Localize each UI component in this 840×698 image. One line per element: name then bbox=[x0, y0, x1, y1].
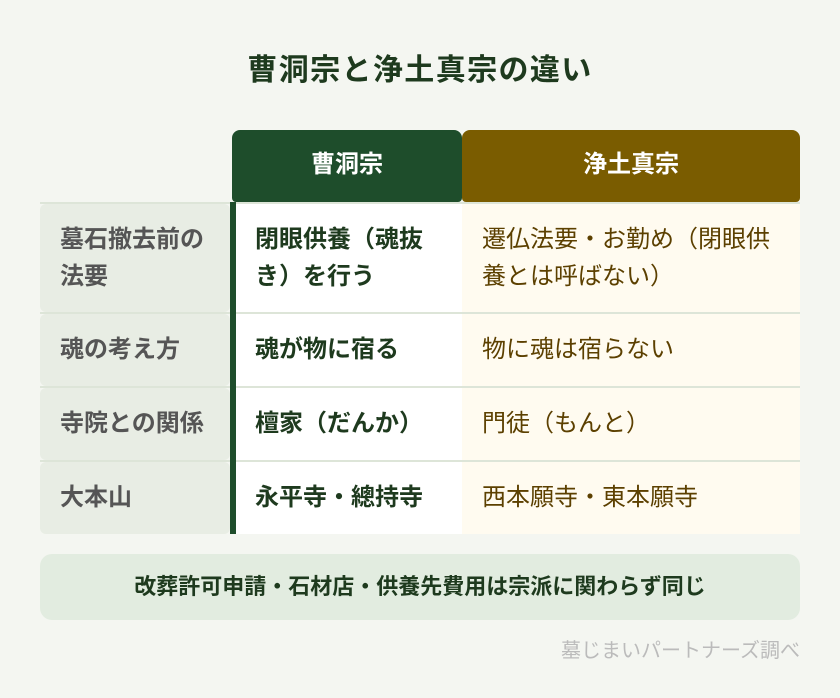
row label bbox=[40, 314, 230, 386]
浄土真宗 cell: 門徒（もんと） bbox=[482, 410, 650, 437]
浄土真宗 cell bbox=[462, 388, 800, 460]
row label bbox=[40, 204, 230, 312]
浄土真宗 cell: 遷仏法要・お勤め（閉眼供 bbox=[482, 226, 770, 253]
浄土真宗 cell bbox=[462, 204, 800, 312]
row label bbox=[40, 388, 230, 460]
comparison table bbox=[40, 130, 800, 534]
浄土真宗 cell bbox=[462, 462, 800, 534]
callout note: 改葬許可申請・石材店・供養先費用は宗派に関わらず同じ bbox=[134, 574, 706, 599]
浄土真宗 cell bbox=[462, 314, 800, 386]
row label: 寺院との関係 bbox=[60, 410, 204, 437]
row: 寺院との関係 bbox=[40, 388, 800, 460]
曹洞宗 cell: 閉眼供養（魂抜 bbox=[255, 226, 423, 253]
header: 曹洞宗: 曹洞宗 bbox=[311, 151, 383, 178]
row label bbox=[40, 462, 230, 534]
浄土真宗 cell: 物に魂は宿らない bbox=[482, 336, 674, 363]
header: 浄土真宗: 浄土真宗 bbox=[583, 151, 679, 178]
row label: 大本山 bbox=[60, 484, 132, 511]
曹洞宗 cell bbox=[230, 314, 462, 386]
浄土真宗 cell: 養とは呼ばない） bbox=[482, 263, 674, 290]
header: 曹洞宗 bbox=[232, 130, 462, 202]
曹洞宗 cell bbox=[230, 462, 462, 534]
callout note bbox=[40, 554, 800, 620]
row label: 法要 bbox=[60, 263, 108, 290]
source note: 墓じまいパートナーズ調べ bbox=[561, 640, 800, 662]
title: 曹洞宗と浄土真宗の違い bbox=[247, 54, 593, 87]
row: 魂の考え方 bbox=[40, 314, 800, 386]
曹洞宗 cell bbox=[230, 388, 462, 460]
曹洞宗 cell: 檀家（だんか） bbox=[255, 410, 423, 437]
曹洞宗 cell: 永平寺・總持寺 bbox=[255, 484, 423, 511]
row: 墓石撤去前の法要 bbox=[40, 204, 800, 312]
曹洞宗 cell: き）を行う bbox=[255, 263, 375, 290]
row label: 魂の考え方 bbox=[60, 336, 180, 363]
浄土真宗 cell: 西本願寺・東本願寺 bbox=[482, 484, 698, 511]
row: 大本山 bbox=[40, 462, 800, 534]
曹洞宗 cell bbox=[230, 204, 462, 312]
row label: 墓石撤去前の bbox=[60, 226, 204, 253]
曹洞宗 cell: 魂が物に宿る bbox=[255, 336, 399, 363]
header: 浄土真宗 bbox=[462, 130, 800, 202]
